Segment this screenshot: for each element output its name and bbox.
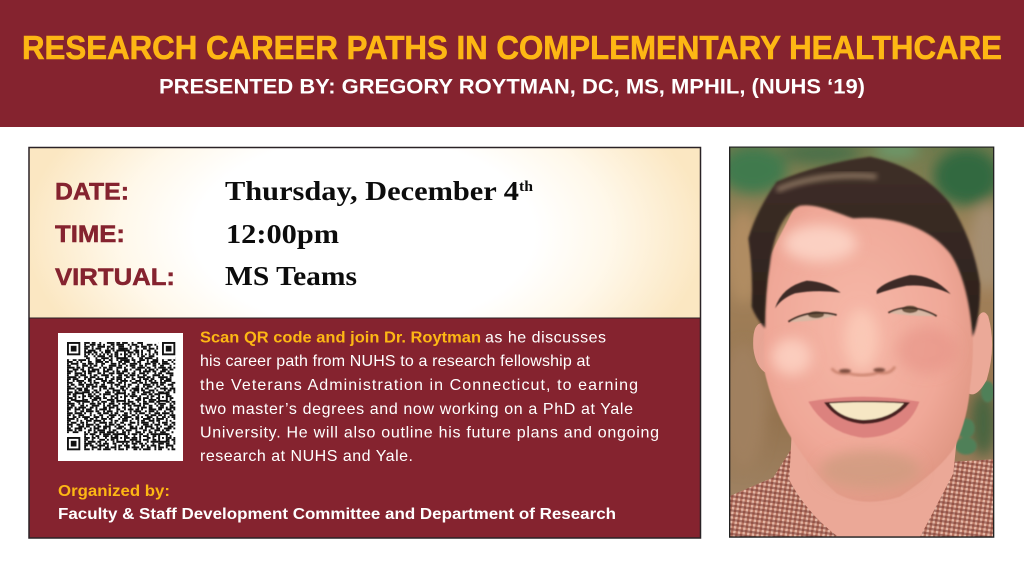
event description text: as he discusses [485,330,606,346]
time value: 12:00pm [226,219,340,249]
eyebrows [775,275,951,308]
event description text: Scan QR code and join Dr. Roytman [200,330,481,346]
time label: TIME: [55,221,125,248]
organizer: Organized by: [58,483,170,500]
eyes [788,306,937,322]
event description text [200,330,659,465]
event description text: the Veterans Administration in Connecticut, to earning [200,377,638,394]
finder patterns [67,342,175,450]
location value: MS Teams [225,261,357,291]
event description text: research at NUHS and Yale. [200,448,413,465]
organizer: Faculty & Staff Development Committee and Department of Research [58,506,616,523]
photo border [730,147,994,537]
mouth [808,397,919,438]
ears [753,323,766,372]
photo background [730,147,993,496]
event description text: two master’s degrees and now working on a PhD at Yale [200,401,633,418]
nose [832,367,895,375]
QR code [58,333,183,461]
neck [789,437,956,536]
alignment patterns [76,351,167,442]
date value: th [519,179,534,195]
hair [748,157,980,337]
panel frame [29,148,700,538]
organizer [58,483,616,523]
panel: event details [29,148,700,318]
date value: Thursday, December 4 [225,176,519,206]
event description text: University. He will also outline his future plans and ongoing [200,424,659,442]
presenter subtitle: PRESENTED BY: GREGORY ROYTMAN, DC, MS, MPHIL, (NUHS ‘19) [159,76,865,98]
header banner [0,0,1024,127]
event description text: his career path from NUHS to a research fellowship at [200,353,591,370]
face [764,197,973,502]
panel: description [29,318,700,538]
date label: DATE: [55,178,129,206]
portrait photo [720,142,1003,537]
virtual label: VIRTUAL: [55,264,175,291]
shirt [730,450,993,537]
